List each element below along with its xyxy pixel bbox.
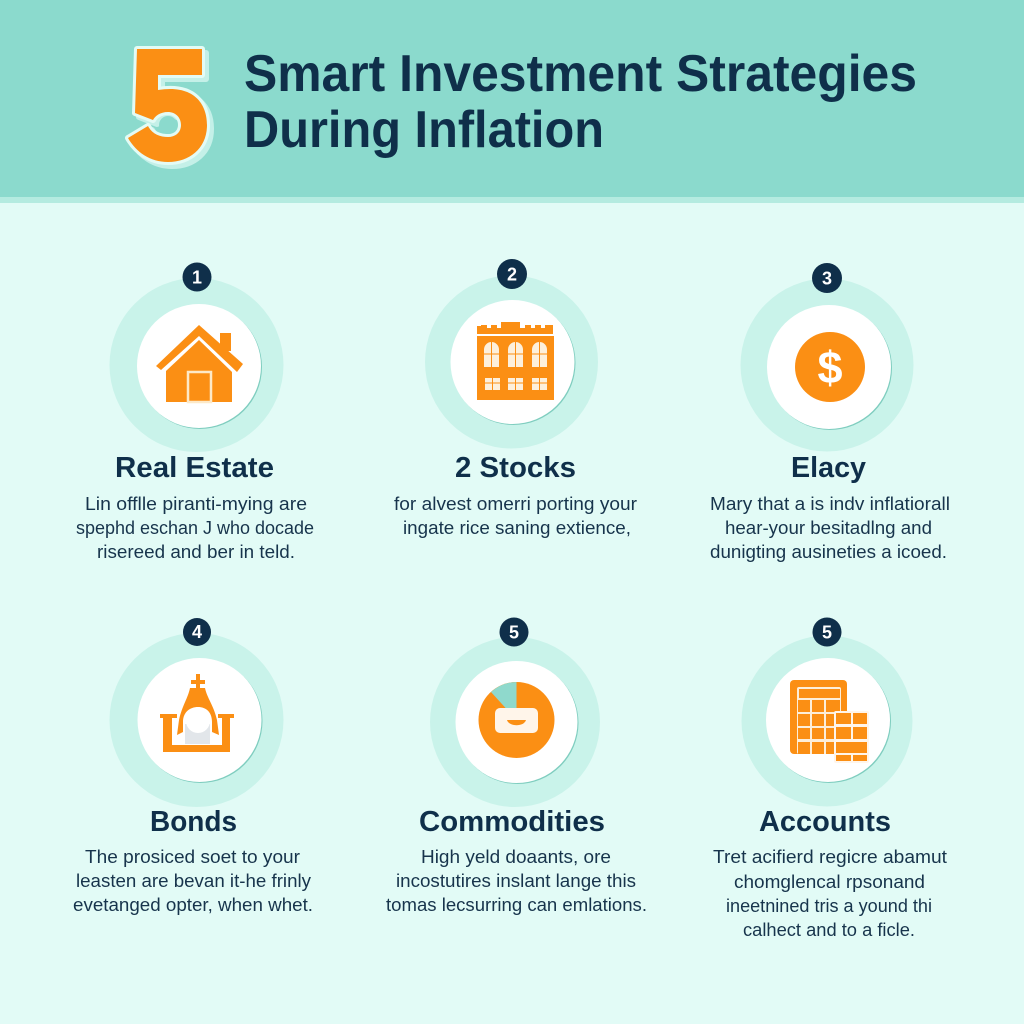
big orange number 5 <box>128 49 211 166</box>
description text: ineetnined tris a yound thi <box>726 896 932 916</box>
title: During Inflation <box>244 101 604 159</box>
icon: house in ring <box>110 278 284 452</box>
description text: leasten are bevan it-he frinly <box>76 871 311 891</box>
icon: dollar coin in ring <box>740 278 914 452</box>
panel: accounts <box>713 618 947 940</box>
description text <box>713 847 947 940</box>
icon: building in ring <box>425 276 598 448</box>
heading: elacy: Elacy <box>791 452 866 484</box>
heading: bonds: Bonds <box>150 806 237 838</box>
number badge 2 <box>497 259 527 289</box>
description text: incostutires inslant lange this <box>396 871 636 891</box>
description text: for alvest omerri porting your <box>394 494 637 514</box>
description text <box>73 847 313 915</box>
heading: stocks: 2 Stocks <box>455 452 576 484</box>
number badge 2: 2 <box>507 264 517 284</box>
description text: Mary that a is indv inflatiorall <box>710 494 950 514</box>
title <box>244 45 917 159</box>
number badge 4 <box>183 618 211 646</box>
description text: spephd eschan J who docade <box>76 518 314 538</box>
panel: stocks <box>394 259 637 538</box>
number badge 3: 3 <box>822 268 832 288</box>
description text: Tret acifierd regicre abamut <box>713 847 947 867</box>
icon: pie chart in ring <box>430 637 600 807</box>
icon: calculator grid in ring <box>742 636 912 806</box>
description text: dunigting ausineties a icoed. <box>710 542 947 562</box>
description text: Lin offlle piranti-mying are <box>85 494 307 514</box>
icon: domed monument in ring <box>110 633 284 807</box>
description text: evetanged opter, when whet. <box>73 895 313 915</box>
description text: hear-your besitadlng and <box>725 518 932 538</box>
number badge 5 (second) <box>812 618 842 646</box>
number badge 5 (second): 5 <box>822 622 832 642</box>
icon: dollar coin in ring: $ <box>817 342 843 393</box>
header banner <box>0 0 1024 203</box>
number badge 3 <box>812 263 842 293</box>
description text <box>386 847 647 915</box>
description text: High yeld doaants, ore <box>421 847 611 867</box>
heading: accounts: Accounts <box>759 806 891 838</box>
number badge 5: 5 <box>509 622 519 642</box>
heading: commodities: Commodities <box>419 806 605 838</box>
panel: bonds <box>73 618 313 915</box>
description text: risereed and ber in teld. <box>97 542 295 562</box>
title: Smart Investment Strategies <box>244 45 917 103</box>
description text: chomglencal rpsonand <box>734 872 925 892</box>
panel: real estate <box>76 262 314 562</box>
description text <box>710 494 950 562</box>
heading: real estate: Real Estate <box>115 452 274 484</box>
panel: elacy <box>710 263 950 562</box>
description text: The prosiced soet to your <box>85 847 300 867</box>
description text: tomas lecsurring can emlations. <box>386 895 647 915</box>
description text: ingate rice saning extience, <box>403 518 631 538</box>
number badge 5 <box>500 618 528 646</box>
description text: calhect and to a ficle. <box>743 920 915 940</box>
number badge 1 <box>182 262 212 292</box>
panel: commodities <box>386 618 647 915</box>
description text <box>76 494 314 562</box>
number badge 1: 1 <box>192 268 202 288</box>
number badge 4: 4 <box>192 622 202 642</box>
description text <box>394 494 637 538</box>
